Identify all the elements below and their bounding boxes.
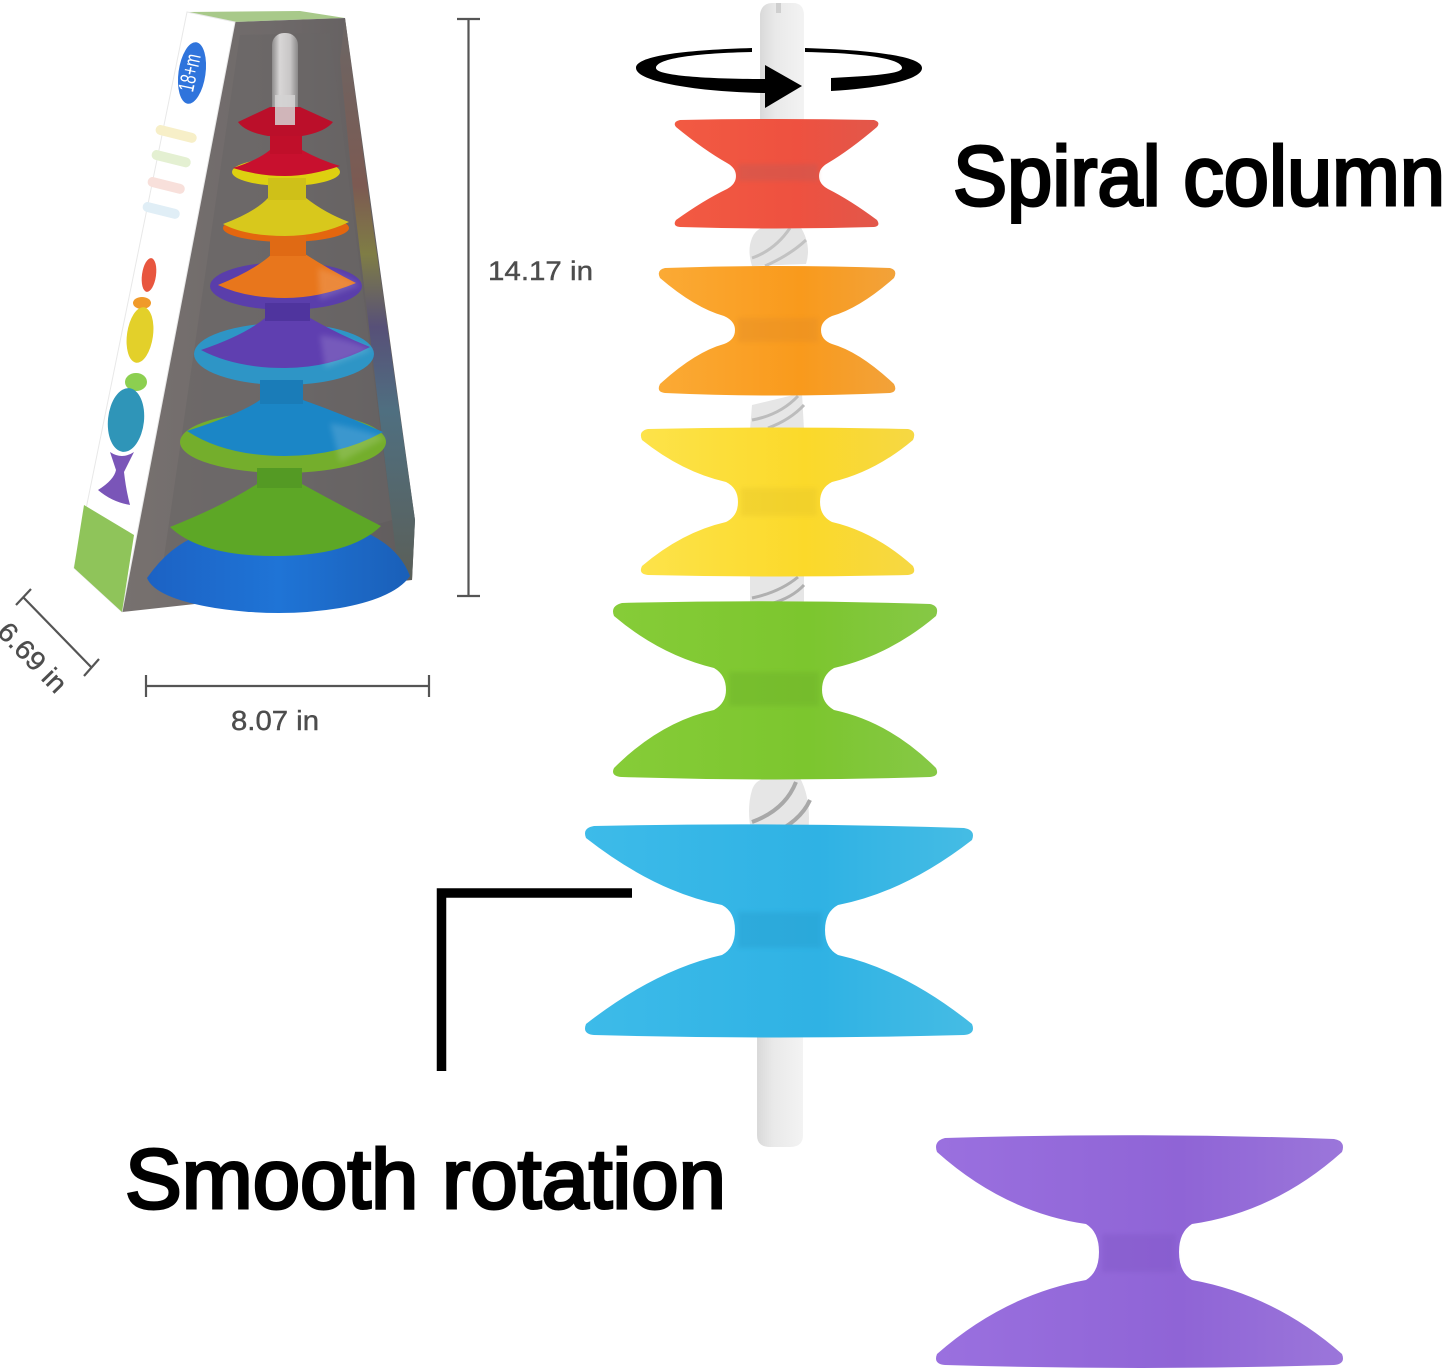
spiral thread section 2 (750, 393, 804, 430)
box feature labels (142, 124, 198, 220)
purple plate (210, 262, 362, 310)
stacked toy (147, 95, 410, 613)
red spool (675, 119, 878, 228)
orange plate (223, 214, 349, 242)
waist band (738, 318, 818, 342)
product box photo (74, 11, 415, 613)
box top flap (187, 11, 345, 22)
heading: Smooth rotation: Smooth rotation (125, 1132, 726, 1226)
orange waist (270, 236, 306, 256)
callout bracket (442, 893, 632, 1071)
blue spool (585, 824, 973, 1038)
box window panel (122, 18, 415, 612)
waist band (729, 672, 819, 706)
plastic highlights (318, 268, 385, 462)
box window recess (160, 33, 392, 585)
blue base (147, 530, 410, 613)
spiral thread section 4 (749, 778, 809, 835)
dimension: height (457, 19, 593, 596)
box side toy illustration (98, 257, 158, 505)
box front white panel (74, 12, 235, 612)
purple waist (265, 303, 310, 321)
yellow plate (232, 158, 340, 186)
red lower flare (233, 150, 340, 176)
waist band (1102, 1234, 1176, 1272)
yellow lower flare (223, 198, 349, 236)
waist band (738, 912, 822, 948)
green lower flare (170, 484, 381, 556)
yellow waist (268, 178, 306, 200)
dimension: width (146, 675, 429, 736)
rotation arrow (636, 48, 922, 108)
green waist (257, 468, 302, 488)
label: 14.17 in: 14.17 in (488, 256, 593, 286)
yellow spool (641, 428, 914, 576)
red top disc (238, 107, 333, 136)
purple lower flare (201, 318, 370, 368)
spiral thread section 1 (750, 226, 808, 266)
pole inside red disc (275, 95, 295, 125)
red waist (270, 130, 302, 154)
box green footer (74, 505, 134, 612)
orange lower flare (218, 254, 356, 298)
spiral thread section 3 (750, 574, 804, 604)
label: 8.07 in: 8.07 in (231, 705, 319, 736)
blue plate (194, 323, 374, 385)
spiral column pole (749, 3, 810, 1147)
orange spool (659, 266, 895, 396)
waist band (741, 488, 817, 516)
purple spool (936, 1135, 1343, 1368)
dimension: depth (0, 589, 99, 699)
toy pole in box (272, 33, 298, 133)
age badge: 18+m (173, 52, 206, 94)
waist band (738, 164, 818, 181)
box right rainbow edge (340, 18, 415, 580)
blue lower flare (187, 400, 383, 456)
green spool (613, 601, 937, 780)
blue waist (260, 380, 303, 404)
green plate (180, 411, 386, 473)
